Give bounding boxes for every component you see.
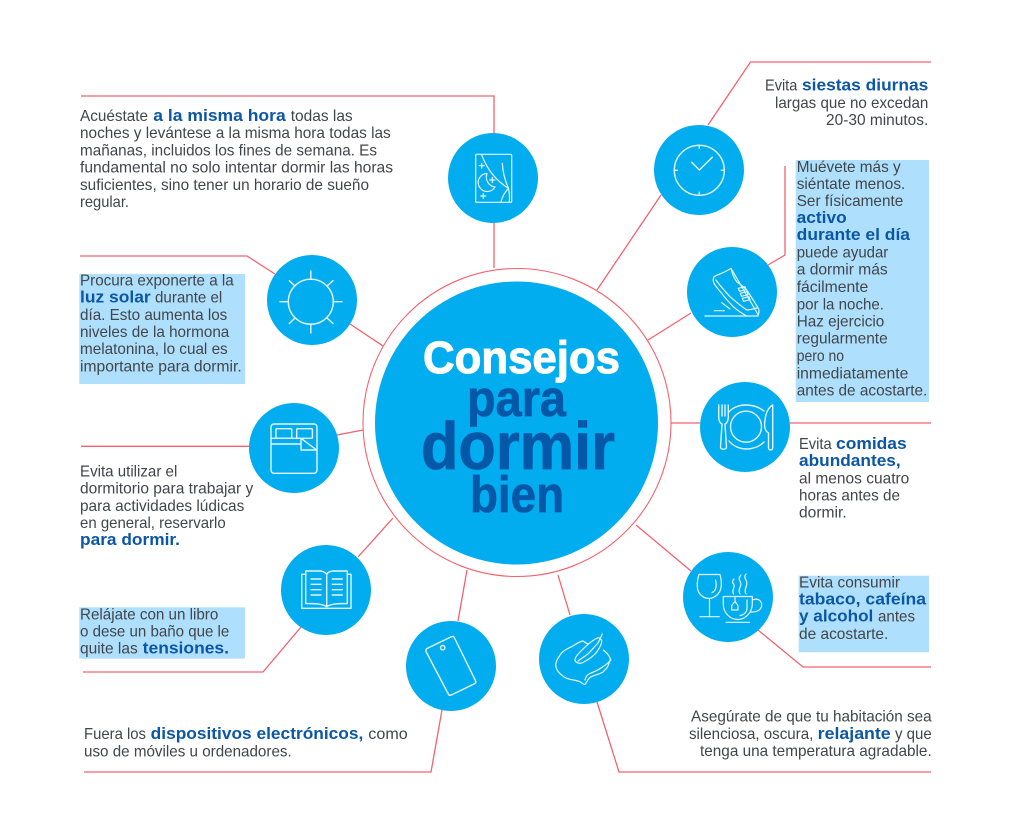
text: Fuera los [84, 726, 146, 743]
icon: pillow and feather [556, 634, 611, 684]
icon: sun [280, 271, 342, 333]
text: para actividades lúdicas [80, 498, 244, 515]
text on highlight: tensiones. [143, 638, 229, 657]
text: fundamental no solo intentar dormir las horas [80, 160, 393, 176]
text on highlight: Ser físicamente [797, 193, 903, 210]
connector [558, 575, 931, 772]
text: dormir. [799, 505, 847, 522]
icon disc [654, 125, 744, 215]
icon: wine glass and tea cup [697, 574, 762, 622]
panel: relax [79, 518, 393, 672]
text: abundantes, [799, 451, 901, 470]
text: al menos cuatro [799, 471, 909, 488]
text on highlight [796, 159, 929, 402]
connector [81, 430, 363, 446]
text on highlight: Relájate con un libro [80, 606, 218, 623]
blue disc [375, 282, 658, 564]
central title badge [363, 268, 671, 576]
text: uso de móviles u ordenadores. [84, 743, 292, 760]
text: silenciosa, oscura, [689, 726, 813, 743]
text on highlight: importante para dormir. [80, 359, 242, 376]
icon disc [539, 614, 629, 704]
text: todas las [291, 108, 353, 125]
text on highlight: regularmente [797, 330, 888, 347]
text on highlight [799, 575, 929, 652]
text: siestas diurnas [802, 76, 928, 95]
text: a la misma hora [153, 106, 286, 125]
title [421, 332, 620, 523]
title: bien [470, 466, 564, 523]
icon: clock [674, 145, 724, 195]
panel: sunlight [79, 255, 383, 384]
text: Evita utilizar el [80, 464, 177, 481]
text on highlight: por la noche. [797, 296, 884, 313]
text: dispositivos electrónicos, [151, 724, 363, 743]
text: 20-30 minutos. [826, 112, 928, 129]
text on highlight: Haz ejercicio [797, 313, 884, 330]
text on highlight: y alcohol [799, 607, 873, 626]
icon disc [687, 247, 777, 337]
text on highlight: pero no [797, 348, 844, 365]
panel: naps [597, 62, 931, 290]
icon disc [683, 552, 773, 642]
text: para dormir. [80, 530, 180, 549]
icon: running shoe [705, 268, 759, 316]
text on highlight: inmediatamente [797, 365, 908, 382]
text on highlight: niveles de la hormona [80, 324, 229, 341]
text: relajante [818, 724, 891, 743]
text: comidas [836, 434, 907, 453]
title: dormir [421, 409, 615, 484]
text: como [368, 726, 408, 743]
text: regular. [80, 194, 129, 211]
icon: phone [426, 636, 476, 695]
icon disc [448, 133, 538, 223]
text [80, 106, 393, 211]
text on highlight: fácilmente [797, 279, 868, 296]
panel: electronic devices [84, 570, 496, 772]
text [689, 709, 932, 760]
text on highlight: durante el [155, 290, 222, 307]
text: horas antes de [799, 488, 900, 505]
icon: open book [302, 571, 351, 608]
text: Acuéstate [80, 108, 148, 125]
text: suficientes, sino tener un horario de sueño [80, 177, 369, 194]
text on highlight: quite las [80, 640, 138, 657]
connector [636, 525, 931, 667]
text: y que [895, 726, 932, 743]
text on highlight: o dese un baño que le [80, 623, 229, 640]
text: dormitorio para trabajar y [80, 481, 253, 498]
text: largas que no excedan [775, 95, 928, 112]
text: Evita [765, 78, 797, 95]
text: Evita [799, 436, 832, 453]
connector [84, 570, 467, 772]
connector [648, 166, 785, 340]
text on highlight: activo [797, 208, 847, 227]
text [799, 434, 909, 522]
text: mañanas, incluidos los fines de semana. Es [80, 142, 377, 160]
text: noches y levántese a la misma hora todas las [80, 125, 391, 142]
text on highlight: puede ayudar [797, 244, 889, 261]
title: Consejos [423, 332, 620, 383]
panel: physical activity [648, 159, 929, 402]
text: tenga una temperatura agradable. [700, 743, 932, 760]
panel: relaxing room [539, 575, 932, 772]
connector [80, 256, 383, 346]
text on highlight: luz solar [80, 288, 151, 307]
text on highlight: de acostarte. [799, 626, 888, 643]
panel: regular schedule [80, 96, 538, 268]
text on highlight [79, 606, 245, 659]
connector [597, 62, 931, 290]
icon: plate and cutlery [719, 405, 773, 450]
text [84, 724, 408, 760]
text [80, 464, 253, 549]
title: para [467, 370, 567, 427]
text [765, 76, 928, 129]
text on highlight: Procura exponerte a la [80, 273, 234, 290]
outer ring [363, 268, 671, 576]
icon: night window with curtain [476, 154, 512, 202]
text on highlight: a dormir más [797, 262, 888, 279]
text on highlight: Evita consumir [799, 575, 901, 592]
text on highlight: tabaco, cafeína [799, 589, 927, 608]
panel: bedroom use [80, 403, 363, 549]
text: Asegúrate de que tu habitación sea [691, 709, 932, 726]
text on highlight [79, 273, 245, 384]
text on highlight: día. Esto aumenta los [80, 307, 227, 324]
text: en general, reservarlo [80, 515, 226, 532]
connector [83, 518, 393, 672]
icon: bed [271, 424, 317, 473]
text on highlight: antes de acostarte. [797, 382, 927, 399]
text on highlight: antes [878, 609, 915, 626]
text on highlight: melatonina, lo cual es [80, 341, 228, 358]
text on highlight: durante el día [797, 225, 911, 244]
text on highlight: siéntate menos. [797, 176, 905, 193]
icon disc [267, 255, 357, 345]
icon disc [700, 382, 790, 472]
icon disc [281, 545, 371, 635]
icon disc [249, 403, 339, 493]
panel: tobacco, caffeine, alcohol [636, 525, 931, 667]
panel: heavy meals [671, 382, 931, 522]
connector [81, 96, 494, 268]
connector [671, 422, 931, 424]
text on highlight: Muévete más y [797, 159, 901, 176]
icon disc [406, 621, 496, 711]
